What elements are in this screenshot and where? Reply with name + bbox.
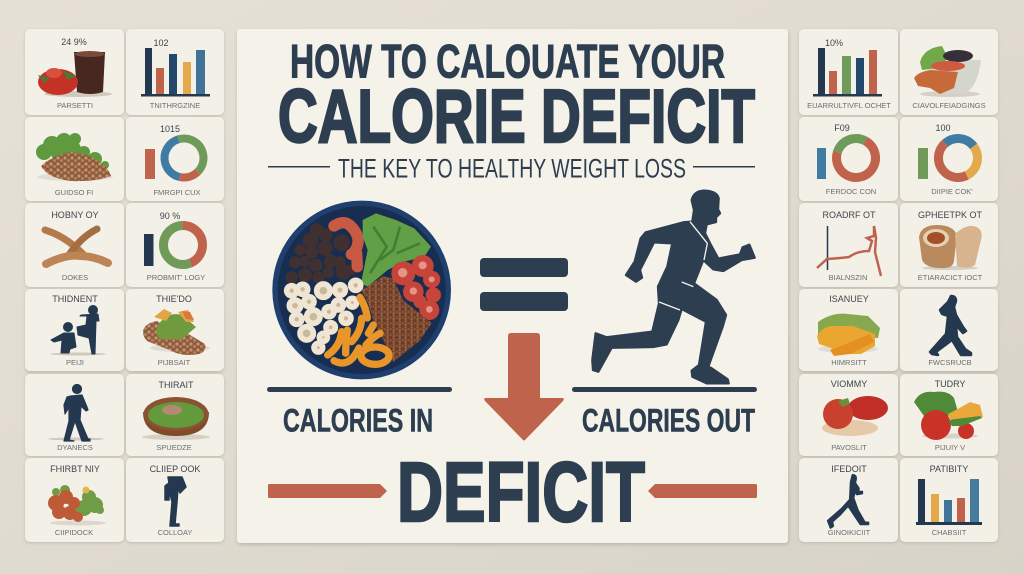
tile value: TUDRY bbox=[935, 379, 965, 389]
tile value: THIDNENT bbox=[52, 294, 98, 304]
tile label: PIJUIY V bbox=[935, 443, 965, 452]
tile label: DIIPIE COK' bbox=[931, 187, 973, 196]
tile value: GPHEETPK OT bbox=[918, 210, 983, 220]
tile: walker bbox=[799, 458, 898, 542]
tile value: IFEDOIT bbox=[831, 464, 867, 474]
lettuce bbox=[361, 213, 431, 287]
label: calories in: CALORIES IN bbox=[283, 402, 433, 438]
tile label: EUARRULTIVFL OCHET bbox=[807, 101, 891, 110]
tile: bar chart bbox=[126, 29, 224, 115]
icon: glass bowl of food bbox=[914, 46, 981, 97]
tile label: CIIPIDOCK bbox=[55, 528, 93, 537]
strawberries bbox=[391, 255, 441, 320]
icon: walking figure bbox=[828, 475, 868, 528]
icon: salad bowl bbox=[142, 397, 210, 440]
tile: bar chart bbox=[799, 29, 898, 115]
donut chart bbox=[918, 131, 985, 185]
tile: tomatoes bbox=[799, 374, 898, 456]
icon: cup and bread bbox=[919, 225, 982, 270]
bar chart bbox=[813, 48, 882, 96]
tile value: ROADRF OT bbox=[822, 210, 876, 220]
icon: orange food bbox=[817, 314, 880, 356]
bar chart bbox=[141, 48, 210, 96]
peppers bbox=[334, 223, 358, 267]
icon: drink and tomato bbox=[38, 51, 112, 97]
tile label: GUIDSO FI bbox=[55, 188, 93, 197]
main panel bbox=[237, 29, 788, 543]
tile label: PARSETTI bbox=[57, 101, 93, 110]
tile label: BIALNSZIN bbox=[829, 273, 867, 282]
tile: bread bbox=[900, 203, 998, 287]
tile value: FHIRBT NIY bbox=[50, 464, 100, 474]
berries bbox=[286, 223, 357, 283]
tile value: CLIIEP OOK bbox=[150, 464, 200, 474]
tile: bowl bbox=[126, 374, 224, 456]
arrow: left bar bbox=[268, 484, 387, 498]
tile: vegetables bbox=[900, 374, 998, 456]
icon: walking figure bbox=[930, 296, 971, 355]
tile label: TNITHRGZINE bbox=[150, 101, 200, 110]
icon: standing figure bbox=[165, 477, 186, 526]
tile: two figures bbox=[25, 289, 124, 371]
tile label: SPUEDZE bbox=[156, 443, 192, 452]
icon: exercising figures bbox=[50, 306, 106, 356]
ground line bbox=[572, 387, 757, 392]
tile value: ISANUEY bbox=[829, 294, 869, 304]
tile value: HOBNY OY bbox=[51, 210, 99, 220]
subtitle: THE KEY TO HEALTHY WEIGHT LOSS bbox=[338, 154, 686, 184]
donut chart bbox=[817, 131, 883, 185]
tile label: CIAVOLFEIADGINGS bbox=[912, 101, 986, 110]
tile value: 1015 bbox=[160, 124, 180, 134]
icon: wooden shapes bbox=[45, 229, 108, 264]
donut chart bbox=[145, 134, 208, 182]
tile label: PAVOSLIT bbox=[831, 443, 867, 452]
tile label: ETIARACICT IOCT bbox=[918, 273, 983, 282]
tile: line chart bbox=[799, 203, 898, 287]
orange strips bbox=[328, 297, 389, 364]
title bbox=[278, 34, 755, 158]
tile value: VIOMMY bbox=[831, 379, 867, 389]
tile: walker bbox=[25, 374, 124, 456]
title line two: CALORIE DEFICIT bbox=[278, 74, 755, 158]
tile value: THIRAIT bbox=[158, 380, 194, 390]
label: calories out: CALORIES OUT bbox=[582, 402, 755, 438]
tile label: FERDOC CON bbox=[826, 187, 876, 196]
donut chart bbox=[144, 226, 202, 266]
tile: orange food bbox=[799, 289, 898, 371]
tile: donut bbox=[900, 117, 998, 201]
arrow: right bar bbox=[648, 484, 757, 498]
bar chart bbox=[916, 479, 982, 525]
line chart bbox=[817, 226, 881, 276]
tile: bar chart bbox=[900, 458, 998, 542]
tile label: FWCSRUCB bbox=[928, 358, 972, 367]
tile value: PATIBITY bbox=[930, 464, 968, 474]
plate line bbox=[267, 387, 452, 392]
tile label: DYANECS bbox=[57, 443, 93, 452]
lentils bbox=[362, 276, 432, 362]
tile label: DOKES bbox=[62, 273, 88, 282]
left tile column bbox=[25, 29, 224, 542]
icon: grains and vegetables bbox=[143, 309, 210, 355]
tile value: 90 % bbox=[160, 211, 180, 221]
tile value: 100 bbox=[935, 123, 951, 133]
tile label: FMRGPI CUX bbox=[153, 188, 201, 197]
tile: wood bbox=[25, 203, 124, 287]
tile: drink and tomato bbox=[25, 29, 124, 115]
tile label: CHABSIIT bbox=[932, 528, 967, 537]
right tile column bbox=[799, 29, 998, 542]
icon: greens and grains bbox=[36, 133, 113, 181]
tile: walker bbox=[900, 289, 998, 371]
tile: donut bbox=[126, 117, 224, 201]
tile label: HIMRSITT bbox=[831, 358, 867, 367]
tile: figure bbox=[126, 458, 224, 542]
icon: walking figure bbox=[48, 384, 104, 441]
icon: food plate bbox=[272, 201, 451, 379]
tile label: COLLOAY bbox=[158, 528, 192, 537]
tile value: THIE'DO bbox=[156, 294, 192, 304]
tile: salad bbox=[25, 458, 124, 542]
tile: greens and grains bbox=[126, 289, 224, 371]
tile: bowl bbox=[900, 29, 998, 115]
title line one: HOW TO CALOUATE YOUR bbox=[290, 34, 725, 88]
icon: runner bbox=[592, 191, 755, 383]
tile value: 10% bbox=[825, 38, 843, 48]
tile: donut bbox=[799, 117, 898, 201]
icon: tomatoes and grain bbox=[822, 396, 888, 436]
tile label: PIJBSAIT bbox=[158, 358, 191, 367]
tile label: PEIJI bbox=[66, 358, 84, 367]
tile label: GINOIKICIIT bbox=[828, 528, 871, 537]
tile value: 102 bbox=[153, 38, 169, 48]
tile: donut bbox=[126, 203, 224, 287]
rings bbox=[287, 280, 361, 352]
equals sign bbox=[480, 258, 568, 311]
tile: greens and grains bbox=[25, 117, 124, 201]
tile value: 24 9% bbox=[61, 37, 87, 47]
icon: salad bbox=[48, 485, 106, 526]
deficit word: DEFICIT bbox=[397, 445, 645, 539]
icon: vegetables bbox=[914, 392, 983, 440]
tile value: F09 bbox=[834, 123, 850, 133]
arrow: down bbox=[484, 333, 564, 440]
tile label: PROBMIT' LOGY bbox=[147, 273, 205, 282]
